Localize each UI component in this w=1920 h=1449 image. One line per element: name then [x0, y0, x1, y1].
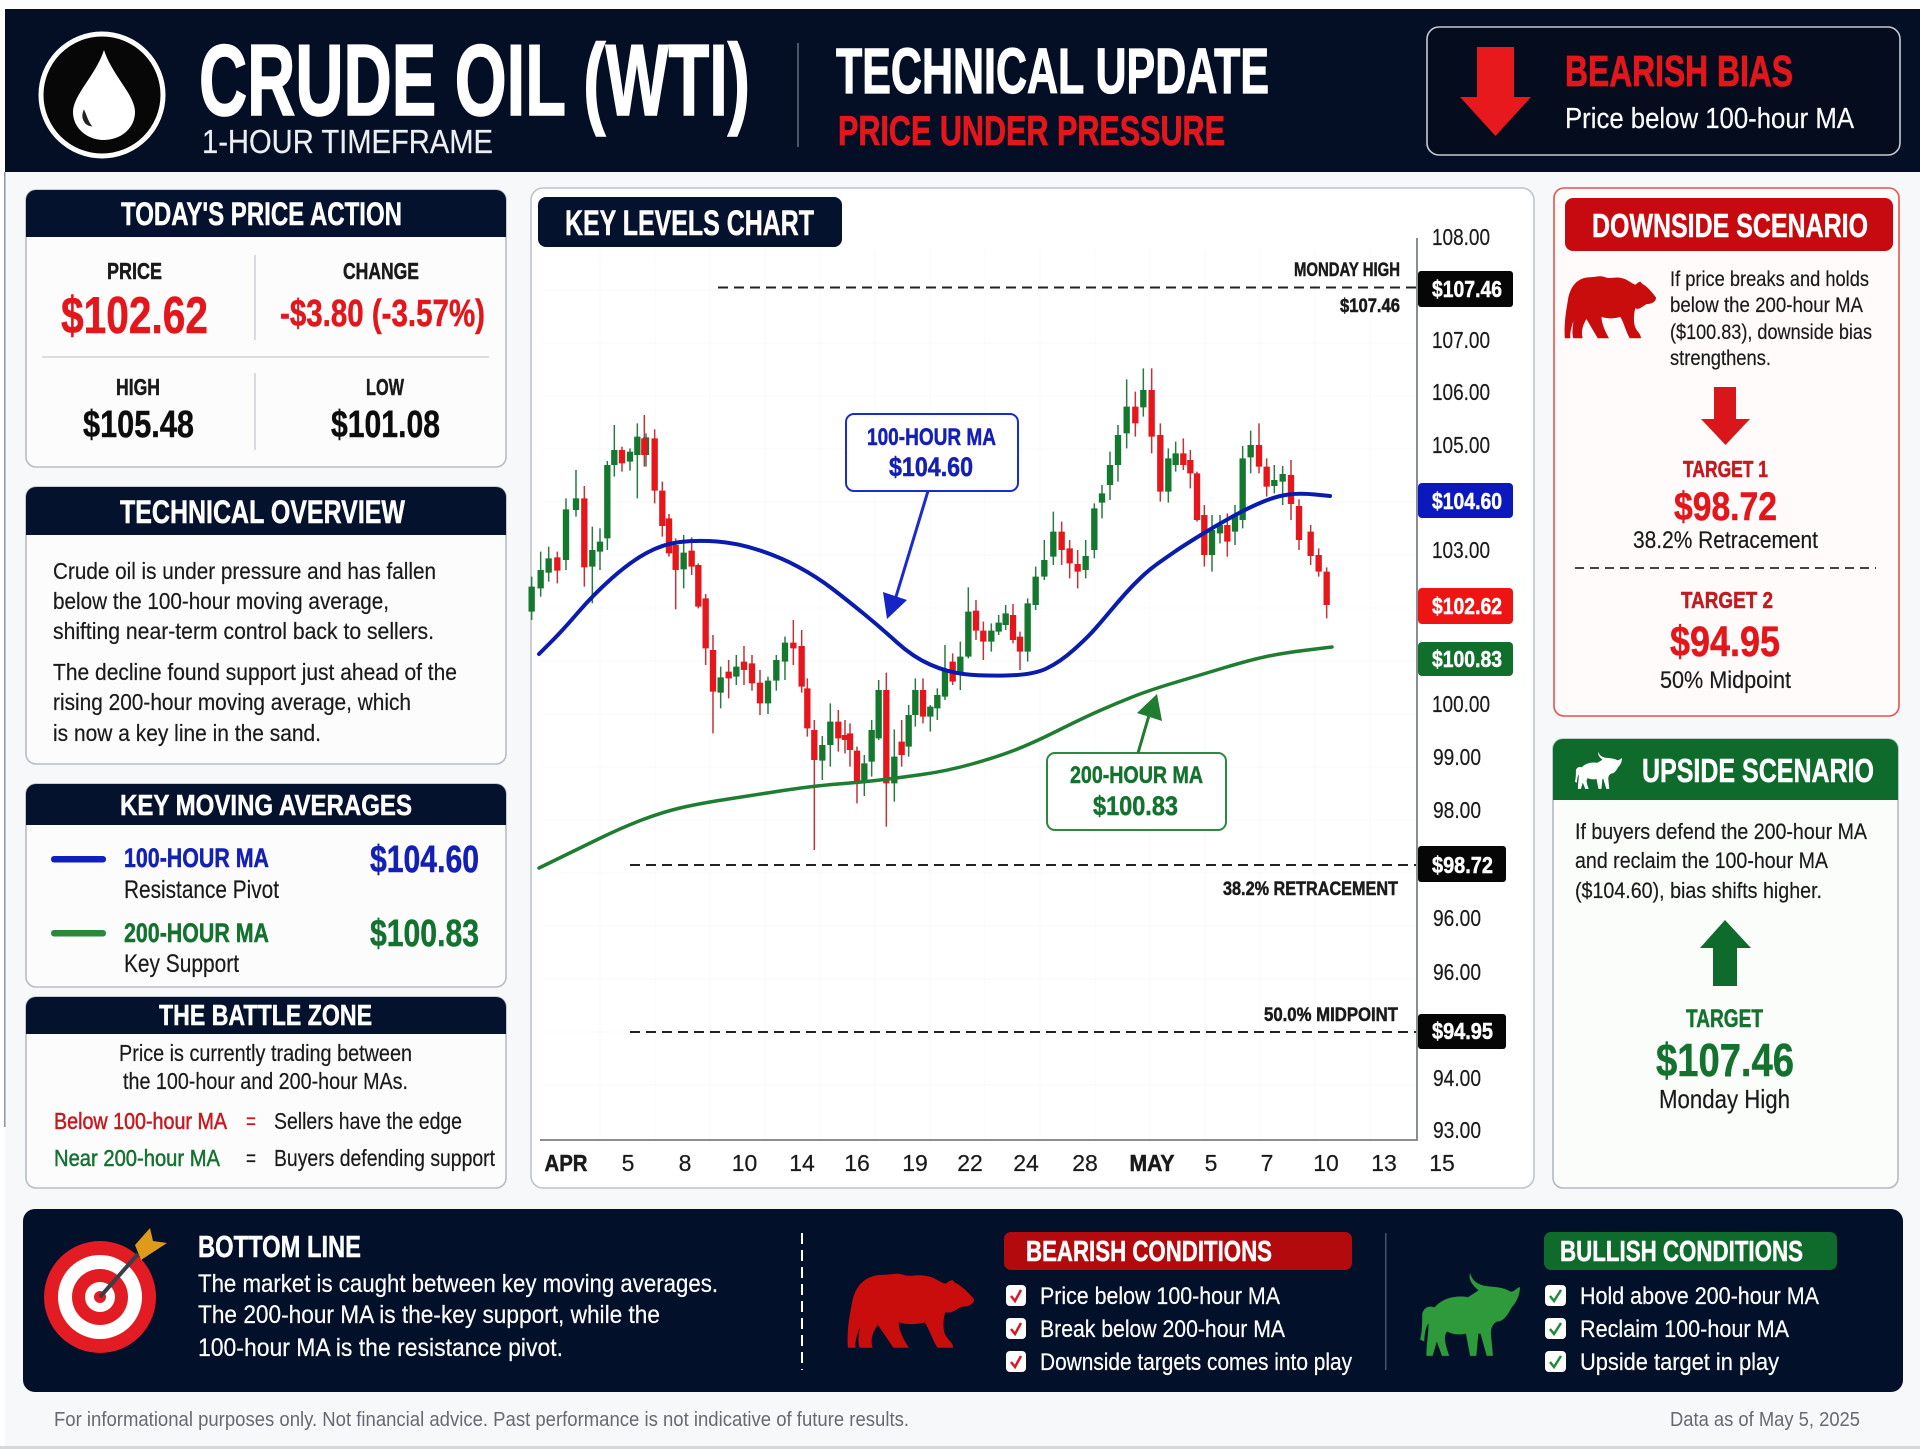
price axis labels: 98.00	[1433, 797, 1481, 823]
icon: red bear	[1565, 276, 1656, 338]
bias label: BEARISH BIAS	[1565, 47, 1793, 96]
bearish conditions: BEARISH CONDITIONS	[1026, 1236, 1272, 1268]
price chip: 98.72	[1418, 846, 1506, 882]
panel header	[1553, 739, 1898, 800]
text block: downside description: below the 200-hour MA	[1670, 294, 1863, 317]
text block: upside description: ($104.60), bias shifts higher.	[1575, 878, 1822, 903]
subtitle: timeframe: 1-HOUR TIMEFRAME	[202, 123, 493, 160]
date axis labels: 22	[957, 1150, 983, 1176]
arrow: to 100-hour MA line	[883, 491, 928, 619]
callout: bearish bias	[1427, 27, 1900, 155]
text block: battle zone intro: Price is currently trading between	[119, 1040, 412, 1066]
text block: downside description: ($100.83), downside bias	[1670, 321, 1872, 344]
price axis labels: 105.00	[1432, 432, 1490, 458]
stat: price: PRICE	[107, 258, 162, 284]
checklist: bearish: Break below 200-hour MA	[1040, 1316, 1285, 1343]
price axis labels: 103.00	[1432, 537, 1490, 563]
text block: bottom line: The 200-hour MA is the-key support, while the	[198, 1301, 660, 1329]
target	[1656, 1005, 1794, 1114]
date axis labels: 14	[789, 1150, 815, 1176]
date axis labels	[544, 1150, 1455, 1176]
stat: low: $101.08	[331, 404, 440, 446]
icon: white bull	[1575, 752, 1622, 789]
text block: downside description: If price breaks and holds	[1670, 268, 1869, 291]
date axis labels: MAY	[1130, 1150, 1174, 1176]
callout: 100-hour MA: $104.60	[889, 452, 973, 482]
stat: change	[280, 258, 485, 335]
text block: bottom line: The market is caught between key moving averages.	[198, 1270, 718, 1298]
panel header	[1565, 198, 1893, 251]
target 2: $94.95	[1670, 618, 1780, 666]
date axis labels: 5	[622, 1150, 634, 1176]
chart title tab	[538, 197, 842, 247]
price chip: 107.46	[1418, 271, 1513, 307]
target 1: TARGET 1	[1683, 456, 1768, 482]
text block: second paragraph: The decline found support just ahead of the	[53, 659, 457, 685]
target 2: 50% Midpoint	[1660, 667, 1791, 694]
text block: battle zone intro: the 100-hour and 200-hour MAs.	[123, 1068, 408, 1094]
footer disclaimer: For informational purposes only. Not financial advice. Past performance is not indicative of future results.	[54, 1409, 909, 1431]
price axis labels: 106.00	[1432, 379, 1490, 405]
price chip: 107.46: $107.46	[1432, 276, 1502, 302]
bullish conditions	[1544, 1232, 1837, 1376]
row: 100-hour MA: 100-HOUR MA	[124, 843, 269, 873]
checklist: bearish: Downside targets comes into play	[1040, 1349, 1352, 1376]
100-hour moving average line	[539, 494, 1330, 676]
row: 200-hour MA: 200-HOUR MA	[124, 918, 269, 948]
icon: green up arrow	[1700, 920, 1751, 986]
date axis labels: 28	[1072, 1150, 1098, 1176]
text block: bottom line: BOTTOM LINE	[198, 1229, 361, 1264]
stat: change: -$3.80 (-3.57%)	[280, 293, 485, 335]
price chip: 94.95: $94.95	[1432, 1018, 1493, 1044]
icon: red down arrow	[1460, 47, 1531, 136]
candlesticks left section	[532, 415, 1028, 850]
icon: red bear	[848, 1274, 974, 1348]
text block: first paragraph: Crude oil is under pressure and has fallen	[53, 558, 436, 584]
row: 100-hour MA	[51, 839, 479, 904]
arrow: to 200-hour MA line	[1137, 694, 1162, 753]
level: Monday high dashed line	[718, 260, 1416, 317]
text block: second paragraph	[53, 659, 457, 746]
price chip: 104.60	[1418, 483, 1513, 518]
checklist: bullish: Reclaim 100-hour MA	[1580, 1316, 1789, 1343]
price axis labels: 96.00	[1433, 959, 1481, 985]
price axis labels: 93.00	[1433, 1117, 1481, 1143]
bullish conditions: BULLISH CONDITIONS	[1560, 1236, 1803, 1268]
panel header	[26, 190, 506, 237]
level: Monday high dashed line: MONDAY HIGH	[1294, 260, 1400, 281]
date axis labels: 10	[732, 1150, 757, 1176]
price axis labels: 108.00	[1432, 224, 1490, 250]
row: near 200-hour MA: =	[246, 1145, 256, 1171]
target 2	[1660, 587, 1791, 694]
row: below 100-hour MA	[54, 1108, 462, 1134]
target 2: TARGET 2	[1681, 587, 1773, 613]
row: near 200-hour MA	[54, 1145, 496, 1171]
target: $107.46	[1656, 1034, 1794, 1086]
row: 200-hour MA	[51, 913, 479, 978]
icon: green bull	[1420, 1273, 1520, 1356]
callout: 200-hour MA: 200-HOUR MA	[1070, 762, 1203, 789]
price axis labels: 99.00	[1433, 744, 1481, 770]
stat: price: $102.62	[61, 287, 208, 345]
level: 38.2% retracement dashed line: 38.2% RETRACEMENT	[1223, 879, 1398, 900]
price axis labels: 100.00	[1432, 691, 1490, 717]
heading: technical update: TECHNICAL UPDATE	[836, 35, 1269, 107]
text block: downside description	[1670, 268, 1872, 370]
price chip: 100.83: $100.83	[1432, 646, 1502, 672]
panel: upside scenario	[1553, 739, 1898, 1188]
panel header	[26, 487, 506, 535]
date axis labels: 16	[844, 1150, 870, 1176]
callout: 100-hour MA	[846, 414, 1018, 491]
text block: downside description: strengthens.	[1670, 347, 1771, 370]
panel: the battle zone	[26, 997, 506, 1188]
row: below 100-hour MA: Sellers have the edge	[274, 1108, 462, 1134]
row: below 100-hour MA: =	[246, 1108, 256, 1134]
icon: target with arrow	[44, 1228, 167, 1353]
price chip: 100.83	[1418, 642, 1513, 676]
row: near 200-hour MA: Near 200-hour MA	[54, 1145, 221, 1171]
stat: high: HIGH	[116, 374, 160, 400]
target 1: $98.72	[1674, 485, 1777, 529]
text block: bottom line: 100-hour MA is the resistance pivot.	[198, 1334, 563, 1362]
header banner	[5, 9, 1920, 172]
panel: downside scenario	[1554, 188, 1899, 716]
price axis labels: 94.00	[1433, 1065, 1481, 1091]
price chip: 102.62: $102.62	[1432, 593, 1502, 619]
target: Monday High	[1659, 1084, 1790, 1114]
date axis labels: 8	[679, 1150, 691, 1176]
text block: first paragraph: below the 100-hour moving average,	[53, 588, 389, 614]
stat: price	[61, 258, 208, 345]
row: below 100-hour MA: Below 100-hour MA	[54, 1108, 228, 1134]
panel: today's price action	[26, 190, 506, 467]
panel: technical overview	[26, 487, 506, 764]
callout: 100-hour MA: 100-HOUR MA	[867, 424, 996, 451]
callout: 200-hour MA: $100.83	[1093, 791, 1178, 821]
panel header: THE BATTLE ZONE	[159, 1000, 372, 1032]
row: 200-hour MA: Key Support	[124, 950, 239, 978]
price chip: 104.60: $104.60	[1432, 488, 1502, 514]
date axis labels: 19	[902, 1150, 928, 1176]
panel: bottom line bar	[23, 1209, 1903, 1392]
candlesticks right section	[1036, 368, 1327, 618]
stat: low	[331, 374, 440, 446]
callout: 200-hour MA	[1047, 753, 1226, 830]
bearish conditions	[1004, 1232, 1352, 1376]
date axis labels: 15	[1429, 1150, 1455, 1176]
checklist: bullish	[1545, 1283, 1819, 1376]
level: Monday high dashed line: $107.46	[1340, 296, 1400, 317]
chart title tab: KEY LEVELS CHART	[565, 204, 814, 243]
text block: upside description	[1575, 819, 1867, 903]
date axis labels: 24	[1013, 1150, 1039, 1176]
panel header	[26, 997, 506, 1034]
text block: upside description: and reclaim the 100-hour MA	[1575, 848, 1828, 873]
price chip: 94.95	[1418, 1014, 1506, 1049]
price chip: 102.62	[1418, 588, 1513, 624]
text block: first paragraph	[53, 558, 436, 644]
text block: bottom line	[198, 1229, 718, 1362]
row: near 200-hour MA: Buyers defending support	[274, 1145, 496, 1171]
stat: high: $105.48	[83, 404, 194, 446]
icon: red down arrow	[1701, 387, 1750, 445]
level: 50% midpoint dashed line: 50.0% MIDPOINT	[1264, 1005, 1398, 1026]
price chip: 98.72: $98.72	[1432, 852, 1493, 878]
date axis labels: APR	[544, 1150, 588, 1176]
target: TARGET	[1686, 1005, 1763, 1033]
icon: oil drop logo	[41, 34, 163, 156]
subheading: price under pressure: PRICE UNDER PRESSURE	[838, 107, 1225, 154]
panel header: KEY MOVING AVERAGES	[120, 790, 412, 822]
text block: battle zone intro	[119, 1040, 412, 1094]
checklist: bullish: Hold above 200-hour MA	[1580, 1283, 1819, 1310]
date axis labels: 5	[1205, 1150, 1217, 1176]
price axis labels: 96.00	[1433, 905, 1481, 931]
date axis labels: 13	[1371, 1150, 1397, 1176]
checklist: bullish: Upside target in play	[1580, 1349, 1779, 1376]
panel: key levels chart	[531, 188, 1534, 1188]
200-hour moving average line	[539, 647, 1332, 868]
footer date: Data as of May 5, 2025	[1670, 1409, 1860, 1431]
stat: low: LOW	[366, 374, 404, 400]
panel: key moving averages	[26, 784, 506, 987]
row: 100-hour MA: Resistance Pivot	[124, 876, 279, 904]
text block: second paragraph: rising 200-hour moving average, which	[53, 689, 411, 715]
date axis labels: 10	[1313, 1150, 1339, 1176]
panel header	[26, 784, 506, 825]
price axis labels: 107.00	[1432, 327, 1490, 353]
panel header: TECHNICAL OVERVIEW	[120, 494, 406, 530]
text block: upside description: If buyers defend the 200-hour MA	[1575, 819, 1867, 844]
price axis line	[540, 238, 1417, 1140]
price axis labels	[1432, 224, 1490, 1143]
checklist: bearish: Price below 100-hour MA	[1040, 1283, 1280, 1310]
title: CRUDE OIL (WTI)	[199, 25, 750, 137]
stat: change: CHANGE	[343, 258, 419, 284]
row: 200-hour MA: $100.83	[370, 913, 479, 955]
target 1	[1633, 456, 1818, 554]
text block: second paragraph: is now a key line in the sand.	[53, 720, 321, 746]
date axis labels: 7	[1261, 1150, 1273, 1176]
target 1: 38.2% Retracement	[1633, 527, 1818, 554]
text block: first paragraph: shifting near-term control back to sellers.	[53, 618, 434, 644]
stat: high	[83, 374, 194, 446]
bias note: Price below 100-hour MA	[1565, 103, 1855, 135]
row: 100-hour MA: $104.60	[370, 839, 479, 881]
panel header: TODAY'S PRICE ACTION	[121, 196, 402, 232]
checklist: bearish	[1006, 1283, 1352, 1376]
